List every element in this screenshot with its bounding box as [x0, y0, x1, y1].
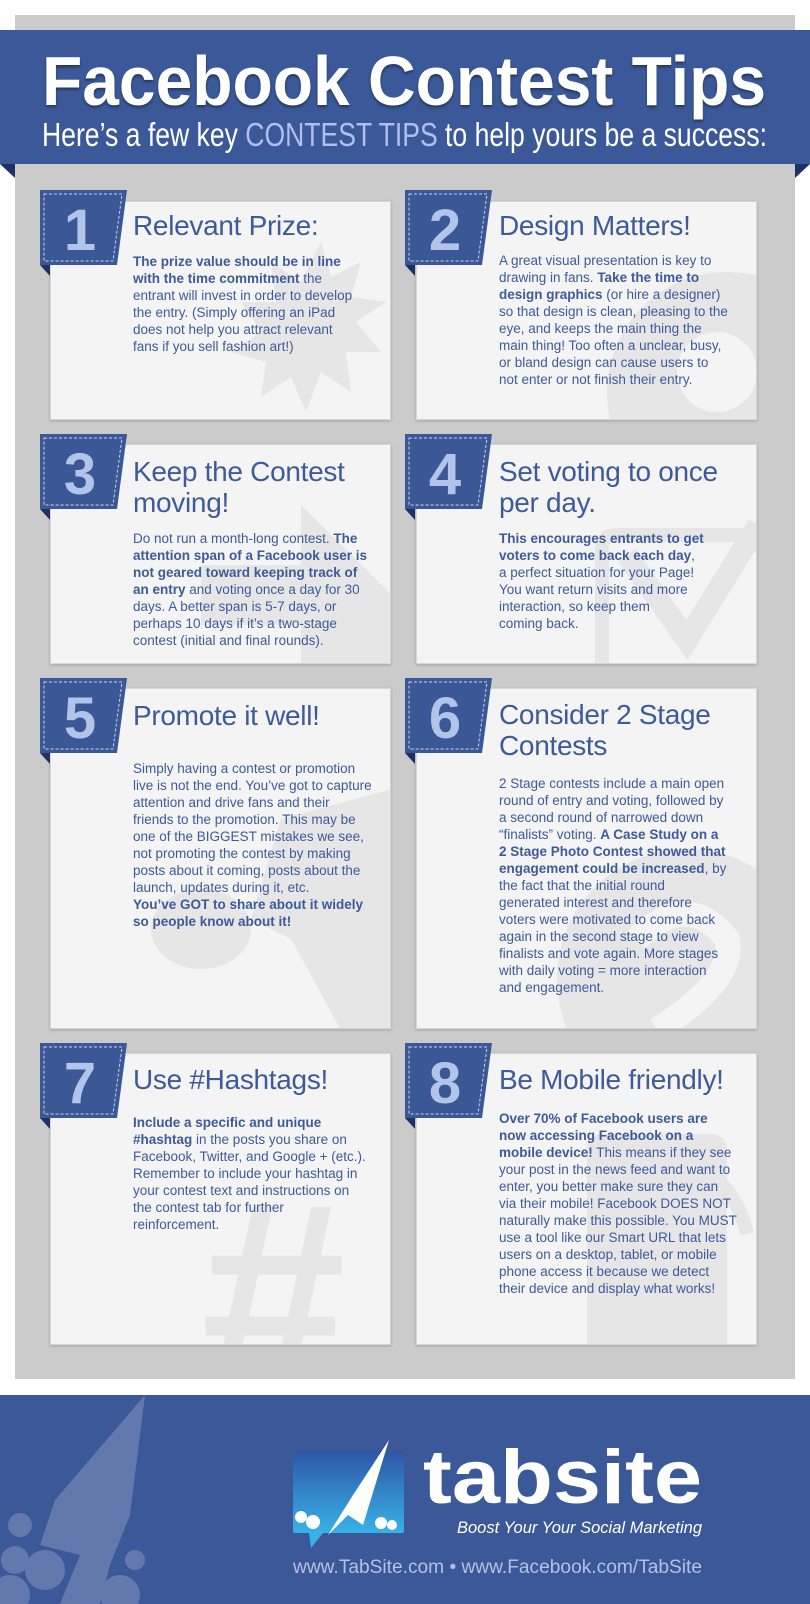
heading: Set voting to once — [499, 456, 718, 487]
text block: one of the BIGGEST mistakes we see, — [133, 829, 364, 844]
badge 8: 8 — [429, 1051, 461, 1116]
text block: with the time commitment the — [133, 271, 322, 286]
text block: design graphics (or hire a designer) — [499, 287, 720, 302]
text block: an entry and voting once a day for 30 — [133, 582, 360, 597]
text block: Over 70% of Facebook users are — [499, 1111, 708, 1126]
heading: Relevant Prize: — [133, 210, 318, 241]
heading: Consider 2 Stage — [499, 699, 711, 730]
text block: enter, you better make sure they can — [499, 1179, 718, 1194]
heading — [499, 699, 711, 761]
text block: You’ve GOT to share about it widely — [133, 897, 363, 912]
text block — [133, 1115, 366, 1232]
panel: 4 Set voting — [416, 444, 757, 664]
text block: the entry. (Simply offering an iPad — [133, 305, 335, 320]
text block: days. A better span is 5-7 days, or — [133, 599, 336, 614]
text block: Remember to include your hashtag in — [133, 1166, 357, 1181]
badge 4 — [405, 434, 492, 520]
badge 8 — [405, 1043, 492, 1129]
text block: users on a desktop, tablet, or mobile — [499, 1247, 717, 1262]
footer — [0, 1395, 810, 1604]
text block: not geared toward keeping track of — [133, 565, 357, 580]
heading: Promote it well! — [133, 700, 320, 731]
icon: rocket watermark — [0, 1395, 145, 1604]
text block: launch, updates during it, etc. — [133, 880, 309, 895]
text block: now accessing Facebook on a — [499, 1128, 693, 1143]
text block — [133, 531, 367, 648]
heading: moving! — [133, 487, 229, 518]
heading: Design Matters! — [499, 210, 691, 241]
text block: perhaps 10 days if it’s a two-stage — [133, 616, 337, 631]
text block: so people know about it! — [133, 914, 291, 929]
badge 4: 4 — [429, 442, 461, 507]
panel: 8 Be Mobile friendly — [416, 1053, 757, 1345]
text block: You want return visits and more — [499, 582, 688, 597]
panel: 3 Keep the Contest moving — [50, 444, 391, 664]
heading: Be Mobile friendly! — [499, 1064, 724, 1095]
heading: Keep the Contest — [133, 456, 345, 487]
text block: “finalists” voting. A Case Study on a — [499, 827, 718, 842]
badge 1: 1 — [64, 198, 96, 263]
text block: the fact that the initial round — [499, 878, 665, 893]
text block: naturally make this possible. You MUST — [499, 1213, 737, 1228]
text block: Include a specific and unique — [133, 1115, 321, 1130]
text block: A great visual presentation is key to — [499, 253, 711, 268]
badge 7 — [40, 1043, 127, 1129]
heading — [499, 456, 718, 518]
heading — [133, 456, 345, 518]
text block: The prize value should be in line — [133, 254, 341, 269]
text block: generated interest and therefore — [499, 895, 692, 910]
panel: 2 Design Matters — [416, 201, 757, 420]
text block: attention and drive fans and their — [133, 795, 330, 810]
text block: and engagement. — [499, 980, 604, 995]
text block: #hashtag in the posts you share on — [133, 1132, 347, 1147]
text block: friends to the promotion. This may be — [133, 812, 356, 827]
text block: Facebook, Twitter, and Google + (etc.). — [133, 1149, 366, 1164]
text block: interaction, so keep them — [499, 599, 650, 614]
text block — [499, 776, 726, 995]
header banner — [0, 30, 810, 178]
text block: drawing in fans. Take the time to — [499, 270, 699, 285]
badge 6: 6 — [429, 686, 461, 751]
badge 3 — [40, 434, 127, 520]
text block: via their mobile! Facebook DOES NOT — [499, 1196, 731, 1211]
text block: not promoting the contest by making — [133, 846, 351, 861]
text block: again in the second stage to view — [499, 929, 699, 944]
badge 2: 2 — [429, 198, 461, 263]
text block: eye, and keeps the main thing the — [499, 321, 702, 336]
logo: tabsite: Boost Your Your Social Marketing — [457, 1518, 703, 1537]
text block: reinforcement. — [133, 1217, 219, 1232]
text block: posts about it coming, posts about the — [133, 863, 360, 878]
text block: voters to come back each day, — [499, 548, 695, 563]
badge 7: 7 — [64, 1051, 96, 1116]
text block — [499, 531, 704, 631]
text block: not enter or not finish their entry. — [499, 372, 692, 387]
badge 3: 3 — [64, 442, 96, 507]
text block: a second round of narrowed down — [499, 810, 703, 825]
panel: 6 Consider 2 Stage Contests — [416, 688, 757, 1029]
panel: 7 Use Hashtags — [50, 1053, 391, 1345]
text block: your post in the news feed and want to — [499, 1162, 730, 1177]
badge 2 — [405, 190, 492, 276]
text block: 2 Stage contests include a main open — [499, 776, 724, 791]
heading: Use #Hashtags! — [133, 1064, 328, 1095]
text block: use a tool like our Smart URL that lets — [499, 1230, 726, 1245]
text block: Simply having a contest or promotion — [133, 761, 355, 776]
panel: 1 Relevant Prize — [50, 201, 391, 420]
text block: This encourages entrants to get — [499, 531, 704, 546]
text block: contest (initial and final rounds). — [133, 633, 324, 648]
text block: voters were motivated to come back — [499, 912, 715, 927]
text block — [499, 1111, 737, 1296]
text block: round of entry and voting, followed by — [499, 793, 723, 808]
text block: a perfect situation for your Page! — [499, 565, 694, 580]
panel: 5 Promote it well — [50, 688, 391, 1029]
text block: main thing! Too often a unclear, busy, — [499, 338, 721, 353]
logo: tabsite — [293, 1440, 703, 1548]
badge 1 — [40, 190, 127, 276]
text block — [133, 254, 352, 354]
text block: or bland design can cause users to — [499, 355, 708, 370]
text block: coming back. — [499, 616, 579, 631]
badge 5 — [40, 678, 127, 764]
title: Facebook Contest Tips — [42, 42, 766, 120]
text block: entrant will invest in order to develop — [133, 288, 352, 303]
text block — [499, 253, 728, 387]
text block: finalists and vote again. More stages — [499, 946, 718, 961]
text block: the contest tab for further — [133, 1200, 284, 1215]
heading: Contests — [499, 730, 607, 761]
text block: so that design is clean, pleasing to the — [499, 304, 728, 319]
badge 6 — [405, 678, 492, 764]
text block: live is not the end. You’ve got to capture — [133, 778, 372, 793]
text block: does not help you attract relevant — [133, 322, 333, 337]
text block: engagement could be increased, by — [499, 861, 726, 876]
text block: 2 Stage Photo Contest showed that — [499, 844, 726, 859]
badge 5: 5 — [64, 686, 96, 751]
text block: their device and display what works! — [499, 1281, 715, 1296]
text block: Do not run a month-long contest. The — [133, 531, 357, 546]
heading: per day. — [499, 487, 596, 518]
text block: fans if you sell fashion art!) — [133, 339, 294, 354]
text block: attention span of a Facebook user is — [133, 548, 367, 563]
text block: your contest text and instructions on — [133, 1183, 349, 1198]
text block: phone access it because we detect — [499, 1264, 709, 1279]
text block: with daily voting = more interaction — [499, 963, 706, 978]
text block: mobile device! This means if they see — [499, 1145, 731, 1160]
text block — [133, 761, 372, 929]
